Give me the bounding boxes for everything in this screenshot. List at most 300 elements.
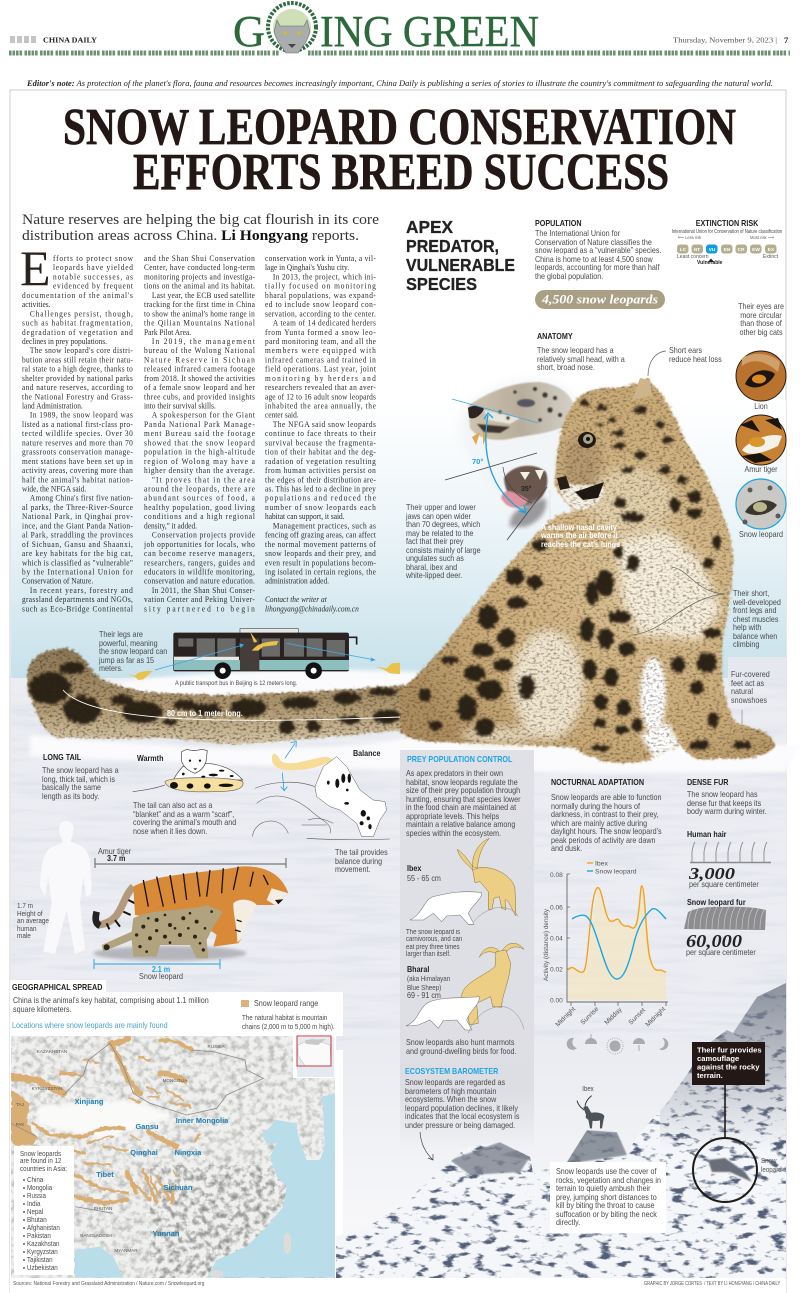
column 2: A spokesperson for the Giant	[151, 410, 255, 420]
carnivore note: The snow leopard is	[406, 929, 460, 936]
anatomy leader lines	[63, 351, 742, 728]
prey text: species within the ecosystem.	[406, 828, 501, 838]
short ears text	[669, 345, 722, 364]
masthead logo: Going Green with leopard medallion: G	[233, 7, 265, 56]
bharal label	[407, 964, 450, 992]
subheading: distribution areas across China. Li Hongyang reports.	[22, 228, 359, 244]
column 3: servation, according to the center.	[265, 309, 376, 318]
prey text	[406, 768, 521, 838]
column 2: around the leopards, there are	[144, 484, 255, 494]
column 1: bution areas still retain their natu-	[22, 355, 133, 365]
front legs text: chest muscles	[733, 614, 778, 624]
nocturnal text: Snow leopards are able to function	[551, 792, 662, 802]
heading: apex predator: VULNERABLE	[406, 255, 515, 275]
prey text: appropriate levels. This helps	[406, 811, 499, 821]
column 2: showed that the snow leopard	[144, 438, 254, 448]
extinction risk scale: EN	[724, 247, 731, 253]
jaw angle marks: 70 and 35 degrees: 35°	[521, 485, 532, 493]
ambush text: suffocation or by biting the neck	[556, 1209, 657, 1219]
extinction risk subtitle: International Union for Conservation of Nature classification	[672, 229, 782, 235]
column 2: three cubs, and provided insights	[144, 392, 254, 401]
dense fur text	[687, 789, 767, 816]
extinction risk scale	[677, 244, 776, 262]
column 2: conservation and nature education.	[144, 576, 254, 586]
column 2: tions on the animal and its habitat.	[144, 281, 254, 291]
snow leopard camouflage label: leopard	[761, 1165, 782, 1174]
warmth text: The tail can also act as a	[133, 800, 212, 810]
chart: activity density by time of day: Midnight	[554, 1006, 577, 1028]
column 3: The NFGA said snow leopards	[273, 420, 376, 429]
eyes text: more circular	[740, 310, 782, 320]
map labels: MYANMAR	[114, 1248, 138, 1253]
column 3: tially focused on monitoring	[265, 281, 376, 291]
long tail heading: LONG TAIL	[43, 752, 81, 762]
prey text: habitat, snow leopards regulate the	[406, 777, 518, 787]
province labels: Ningxia	[175, 1148, 202, 1157]
column 2: Nature Reserve in Sichuan	[144, 355, 254, 365]
legs text: powerful, meaning	[99, 638, 158, 648]
geographical heading: GEOGRAPHICAL SPREAD	[12, 982, 102, 992]
column 2: job opportunities for locals, who	[144, 539, 254, 549]
icons: eye comparison	[736, 351, 786, 529]
risk labels: vulnerable: Vulnerable	[697, 260, 722, 266]
warmth heading: Warmth	[137, 753, 163, 763]
extinction risk scale: LC	[680, 247, 687, 253]
leopard fur label: Snow leopard fur	[687, 897, 746, 907]
camouflage callout: against the rocky	[697, 1062, 760, 1072]
column 2: educators in wildlife monitoring,	[144, 567, 254, 577]
icons: times of day	[567, 1034, 668, 1054]
nocturnal text	[551, 792, 662, 853]
title: EFFORTS BREED SUCCESS	[133, 144, 669, 201]
jaws text: consists mainly of large	[406, 545, 481, 555]
column 1: which is classified as "vulnerable"	[22, 558, 133, 567]
legend text: Snow leopard range	[254, 998, 318, 1008]
tail length label: 80 cm to 1 meter long.	[167, 708, 243, 718]
column 1: declines in prey populations.	[22, 337, 107, 346]
dense fur text: body warm during winter.	[687, 806, 767, 816]
map labels: BANGLADESH	[80, 1233, 112, 1238]
column 1: of Sichuan, Gansu and Shaanxi,	[22, 539, 133, 549]
human height label: male	[17, 931, 31, 940]
legs text: jump as far as 15	[99, 655, 154, 665]
heading: apex predator: SPECIES	[406, 274, 477, 294]
column 2: the Qilian Mountains National	[144, 318, 255, 328]
column 2: can become reserve managers,	[144, 549, 254, 558]
column 3: Management practices, such as	[273, 521, 376, 531]
column 3: survival because the fragmenta-	[265, 438, 376, 448]
column 3: conservation work in Yunta, a vil-	[265, 254, 376, 263]
column 2: healthy population, good living	[144, 502, 254, 512]
province labels	[75, 1097, 229, 1238]
column 1: land Administration.	[22, 401, 83, 411]
column 1: shelter provided by national parks	[22, 373, 133, 383]
ibex on rock label: Ibex	[582, 1086, 594, 1093]
column 1: are key habitats for the big cat,	[22, 549, 133, 558]
chart: activity density by time of day: Activity (distance) density	[543, 908, 550, 981]
chart: activity density by time of day: Midnight	[644, 1006, 667, 1028]
ecosystem heading: ECOSYSTEM BAROMETER	[405, 1066, 498, 1076]
column 3: the normal movement patterns of	[265, 539, 376, 549]
extinction risk scale: CR	[738, 247, 745, 253]
column 3: from Yunta formed a snow leo-	[265, 327, 376, 337]
tiger length label: Amur tiger	[98, 846, 131, 856]
anatomy text: The snow leopard has a	[537, 345, 614, 355]
feet text: Fur-covered	[731, 669, 770, 679]
column 3: the edges of their distribution are-	[265, 475, 376, 484]
column 1: the National Forestry and Grass-	[22, 392, 133, 401]
ecosystem text: ecosystems. When the snow	[405, 1094, 496, 1104]
map labels: RUSSIA	[207, 1044, 225, 1049]
warmth text	[133, 800, 236, 836]
population pill	[535, 290, 665, 309]
human height label: human	[17, 924, 37, 933]
date and page number: 7	[784, 35, 789, 45]
mountains	[336, 983, 786, 1278]
ibex illustration	[410, 838, 518, 924]
jaws text: may be related to the	[406, 528, 473, 538]
bus caption: A public transport bus in Beijing is 12 meters long.	[175, 680, 297, 687]
extinction risk scale: EW	[752, 247, 760, 253]
column 1: grassland departments and NGOs,	[22, 595, 133, 604]
ecosystem text	[405, 1077, 520, 1130]
column 3: radation of vegetation resulting	[265, 456, 376, 466]
human hair label: Human hair	[687, 829, 726, 839]
column 3: tion of their habitat and the deg-	[265, 447, 376, 457]
risk labels: least concern: Least concern	[677, 254, 709, 260]
chart: activity density by time of day: 0.04	[550, 936, 563, 942]
chart: activity density by time of day: 0.06	[550, 904, 563, 912]
column 1: degradation of vegetation and	[22, 327, 133, 337]
province labels: Yunnan	[153, 1229, 180, 1238]
background: snow field	[11, 657, 800, 1240]
column 1: by the International Union for	[22, 567, 133, 577]
dense fur text: dense fur that keeps its	[687, 798, 761, 808]
icons: snow leopard fur	[684, 907, 766, 930]
province labels: Qinghai	[130, 1148, 158, 1157]
legs text: the snow leopard can	[99, 646, 167, 656]
column 3: lage in Qinghai's Yushu city.	[265, 263, 349, 272]
column 3: bharal populations, was expand-	[265, 290, 376, 300]
ibex on rock	[577, 1096, 604, 1128]
carnivore note	[406, 929, 462, 958]
column 3: habitat can support, it said.	[265, 512, 345, 521]
carnivore note: eat prey three times	[406, 944, 460, 951]
population heading: POPULATION	[535, 218, 582, 228]
countries list: Kyrgyzstan	[27, 1247, 58, 1256]
balance drawing	[253, 742, 390, 840]
tiger and snow leopard size comparison	[93, 866, 288, 961]
column 3: age of 12 to 16 adult snow leopards	[265, 392, 376, 401]
human height label: Height of	[17, 909, 43, 918]
column 2: into their survival skills.	[144, 401, 215, 411]
column 2: and the Shan Shui Conservation	[144, 254, 254, 263]
arrow from ecosystem text	[420, 1132, 433, 1160]
jaws text: ungulates such as	[406, 553, 464, 563]
column 2: monitoring projects and investiga-	[144, 272, 255, 282]
warmth text: “blanket” and as a warm “scarf”,	[133, 809, 234, 819]
heading: apex predator	[406, 217, 515, 294]
snow leopard camouflage label: Snow	[761, 1156, 777, 1165]
long tail text: long, thick tail, which is	[42, 774, 115, 784]
tiger length value: 3.7 m	[107, 853, 125, 863]
column 3: monitoring by herders and	[265, 373, 376, 383]
date and page number: Thursday, November 9, 2023 |	[673, 36, 777, 44]
anatomy text: short, broad nose.	[537, 362, 595, 372]
countries list: India	[27, 1199, 40, 1208]
China Daily nameplate: CHINA DAILY	[43, 36, 97, 44]
masthead leaf rule	[9, 50, 790, 56]
population text: snow leopard as a “vulnerable” species.	[535, 245, 661, 255]
countries list: Bhutan	[27, 1215, 47, 1224]
column 2: higher density than the average.	[144, 466, 254, 475]
population text: China is home to at least 4,500 snow	[535, 254, 653, 264]
front legs text: well-developed	[733, 597, 781, 607]
countries intro: countries in Asia:	[20, 1164, 67, 1173]
column 2: released infrared camera footage	[144, 364, 255, 374]
prey text: As apex predators in their own	[406, 768, 503, 778]
column 1: activity areas, covering more than	[22, 466, 133, 475]
column 3: populations and reduced the	[265, 493, 376, 503]
column 3: members were equipped with	[265, 346, 376, 355]
column 3: ing isolated in certain regions, the	[265, 567, 376, 577]
short ears text: reduce heat loss	[669, 354, 722, 364]
eyes text: other big cats	[739, 327, 783, 337]
heading: apex predator: PREDATOR,	[406, 236, 499, 256]
human height label: 1.7 m	[17, 901, 33, 910]
title	[63, 99, 736, 201]
column 2: In 2011, the Shan Shui Conser-	[151, 585, 255, 595]
column 3: continue to face threats to their	[265, 429, 376, 438]
prey text: size of their prey population through	[406, 785, 520, 795]
jaw angle marks: 70 and 35 degrees	[445, 399, 547, 540]
column 2: researchers, rangers, guides and	[144, 558, 254, 567]
snarling head overlay	[460, 379, 581, 527]
countries list: Russia	[27, 1191, 46, 1200]
column 2: vation Center and Peking Univer-	[144, 595, 255, 604]
column 1: In 1989, the snow leopard was	[30, 410, 133, 420]
column 2: sity partnered to begin	[144, 604, 254, 614]
chart: activity density by time of day: 0.02	[550, 966, 563, 974]
column 1: such as Eco-Bridge Continental	[22, 604, 134, 614]
column 3: as. This has led to a decline in prey	[265, 484, 376, 494]
habitat note	[242, 1013, 335, 1031]
warmth drawing	[133, 749, 243, 792]
front legs text: Their short,	[733, 588, 769, 598]
countries intro: Snow leopards	[20, 1149, 61, 1158]
big fur density numbers	[686, 864, 742, 951]
column 2: "It proves that in the area	[151, 475, 255, 484]
column 1: fforts to protect snow	[53, 254, 133, 263]
column 1: National Park, in Qinghai prov-	[22, 512, 133, 521]
province labels: Xinjiang	[75, 1097, 104, 1106]
column 1: Among China's first five nation-	[30, 493, 133, 503]
feet text: snowshoes	[731, 695, 767, 705]
map labels: TAJ	[16, 1102, 24, 1107]
nocturnal text: and dusk.	[551, 843, 582, 853]
population text: The International Union for	[535, 228, 620, 238]
column 1: evidenced by frequent	[53, 281, 134, 291]
countries list: Uzbekistan	[27, 1263, 58, 1272]
column 1: In recent years, forestry and	[30, 585, 133, 595]
jaws text: Their upper and lower	[406, 502, 476, 512]
chart: activity density by time of day	[543, 860, 668, 1028]
heading: apex predator: APEX	[406, 217, 453, 237]
column 3: infrared cameras and trained in	[265, 355, 376, 365]
prey text: maintain a relative balance among	[406, 819, 515, 829]
bharal label: Bharal	[407, 964, 429, 974]
big fur density numbers: 60,000	[686, 931, 742, 951]
range legend swatch	[241, 1000, 249, 1007]
legs text: meters.	[99, 663, 123, 673]
legs text: Their legs are	[99, 629, 143, 639]
ambush text: directly.	[556, 1217, 580, 1227]
warmth text: nose when it lies down.	[133, 826, 207, 836]
column 3: snow leopards and their prey, and	[265, 549, 376, 558]
front legs text: help with	[733, 622, 761, 632]
column 1: activities.	[22, 300, 51, 309]
feet text	[731, 669, 770, 705]
column 1: such as habitat fragmentation,	[22, 318, 133, 328]
jaws text: white-lipped deer.	[406, 570, 462, 580]
chart: activity density by time of day: 0.00	[550, 998, 563, 1004]
map labels: KAZAKHSTAN	[37, 1049, 67, 1054]
prey text: hunting, ensuring that species lower	[406, 794, 521, 804]
ambush text: kill by biting the throat to cause	[556, 1200, 655, 1210]
nasal cavity text: reaches the cat’s lungs	[541, 539, 620, 549]
dense fur text: The snow leopard has	[687, 789, 758, 799]
column 1: Conservation of Nature.	[22, 576, 93, 586]
column 3: administration added.	[265, 576, 329, 586]
column 2: of a female snow leopard and her	[144, 383, 255, 392]
countries intro	[20, 1149, 67, 1173]
chart: activity density by time of day: Midday	[603, 1006, 624, 1026]
human hair unit: per square centimeter	[689, 879, 759, 889]
column 1: wide, the NFGA said.	[22, 484, 86, 494]
white text box on mountain	[550, 1162, 666, 1233]
column 1: listed as a national first-class pro-	[22, 420, 133, 429]
countries list	[27, 1175, 60, 1272]
column 1: half the animal's habitat nation-	[22, 475, 133, 484]
chart: activity density by time of day: Sunrise	[579, 1005, 600, 1026]
risk direction labels right: Most risk ⟶	[750, 236, 774, 241]
eyes text	[738, 301, 784, 337]
ambush text: terrain to quietly ambush their	[556, 1183, 651, 1193]
population text: the global population.	[535, 271, 603, 281]
camouflage callout	[692, 1042, 765, 1202]
legs text	[98, 629, 167, 673]
column 3: even result in populations becom-	[265, 558, 376, 567]
geographical text: China is the animal’s key habitat, comprising about 1.1 million	[13, 995, 209, 1005]
balance text	[335, 847, 388, 874]
long tail text: length as its body.	[42, 791, 99, 801]
jaws text: jaws can open wider	[406, 511, 471, 521]
column 3: Contact the writer at	[265, 595, 328, 604]
population pill: 4,500 snow leopards	[541, 292, 658, 306]
camouflage callout: camouflage	[697, 1054, 739, 1063]
nocturnal text: darkness, in contrast to their prey,	[551, 809, 659, 819]
map of snow leopard range	[11, 1036, 335, 1278]
column 3: lihongyang@chinadaily.com.cn	[265, 604, 359, 614]
countries box	[14, 1146, 74, 1275]
anatomy text	[537, 345, 625, 372]
feet text: natural	[731, 686, 753, 696]
ecosystem text: barometers of high mountain	[405, 1086, 496, 1096]
column 1: documentation of the animal's	[22, 290, 133, 300]
front legs text: balance when	[733, 631, 777, 641]
nocturnal heading: NOCTURNAL ADAPTATION	[551, 777, 644, 787]
column 1: and nature reserves, according to	[22, 383, 133, 392]
ambush text: rocks, vegetation and changes in	[556, 1175, 661, 1185]
column 1: Challenges persist, though,	[30, 309, 133, 318]
column 1: ment stations have been set up in	[22, 456, 133, 466]
credits: GRAPHIC BY JORGE CORTES / TEXT BY LI HONGYANG / CHINA DAILY	[644, 1281, 780, 1287]
countries list: Afghanistan	[27, 1223, 60, 1232]
chart: activity density by time of day: 0.08	[550, 872, 563, 879]
bharal size: 69 - 91 cm	[407, 990, 441, 1000]
ibex label	[407, 863, 441, 883]
feet text: feet act as	[731, 678, 764, 688]
extinction risk heading: EXTINCTION RISK	[696, 218, 758, 228]
big fur density numbers: 3,000	[688, 864, 736, 883]
column 3: In 2013, the project, which ini-	[273, 272, 376, 282]
editor's note: Editor's note: As protection of the planet's flora, fauna and resources becomes increasingly important, China Daily is publishing a series of stories to illustrate the country's commitment to safeguarding the natural world.	[26, 79, 773, 88]
column 3: inhabited the area annually, the	[265, 401, 376, 411]
countries list: Pakistan	[27, 1231, 51, 1240]
column 1: ince, and the Giant Panda Nation-	[22, 521, 133, 531]
extinction risk scale: VU	[709, 247, 716, 253]
ecosystem text: leopard population declines, it likely	[405, 1103, 518, 1113]
column 1: ral state to a high degree, thanks to	[22, 364, 133, 374]
sources: Sources: National Forestry and Grassland Administration / Nature.com / Snowleopard.org	[13, 1281, 204, 1287]
province labels: Gansu	[136, 1122, 159, 1131]
article text columns	[20, 240, 377, 614]
population text: Conservation of Nature classifies the	[535, 237, 652, 247]
eyes text: Their eyes are	[738, 301, 784, 311]
countries list: China	[27, 1175, 43, 1184]
column 3: ed to include snow leopard con-	[265, 300, 376, 309]
eye label: tiger: Amur tiger	[744, 464, 778, 474]
countries list: Tajikistan	[27, 1255, 53, 1264]
nasal cavity text: A shallow nasal cavity	[541, 522, 617, 532]
map labels: BHUTAN	[94, 1206, 112, 1211]
jaws text: fact that their prey	[406, 536, 463, 546]
column 3: fencing off grazing areas, can affect	[265, 530, 377, 540]
column 2: from 2018. It showed the activities	[144, 373, 254, 383]
bharal label: (aka Himalayan	[407, 974, 450, 983]
ecosystem text: indicates that the local ecosystem is	[405, 1111, 519, 1121]
jaws text	[406, 502, 481, 580]
habitat note: The natural habitat is mountain	[242, 1013, 327, 1022]
geographical text: square kilometers.	[13, 1004, 72, 1014]
jaw angle marks: 70 and 35 degrees: 70°	[472, 457, 483, 466]
front legs text: climbing	[733, 639, 759, 649]
prey text: in the food chain are maintained at	[406, 802, 516, 812]
icons: human hair	[690, 842, 771, 862]
column 2: region of Wolong may have a	[144, 456, 255, 466]
balance text: balance during	[335, 856, 382, 866]
column 2: to show the animal's home range in	[144, 309, 254, 318]
balance text: movement.	[335, 864, 371, 874]
ibex label: Ibex	[407, 863, 421, 873]
column 1: tected wildlife species. Over 30	[22, 429, 133, 438]
leopard fur unit: per square centimeter	[686, 947, 756, 957]
panel: prey column background	[400, 750, 534, 1150]
jaws text: bharal, ibex and	[406, 562, 457, 572]
warmth text: covering the animal’s mouth and	[133, 817, 236, 827]
inset locator map	[293, 1036, 336, 1078]
column 2: density," it added.	[144, 521, 197, 531]
